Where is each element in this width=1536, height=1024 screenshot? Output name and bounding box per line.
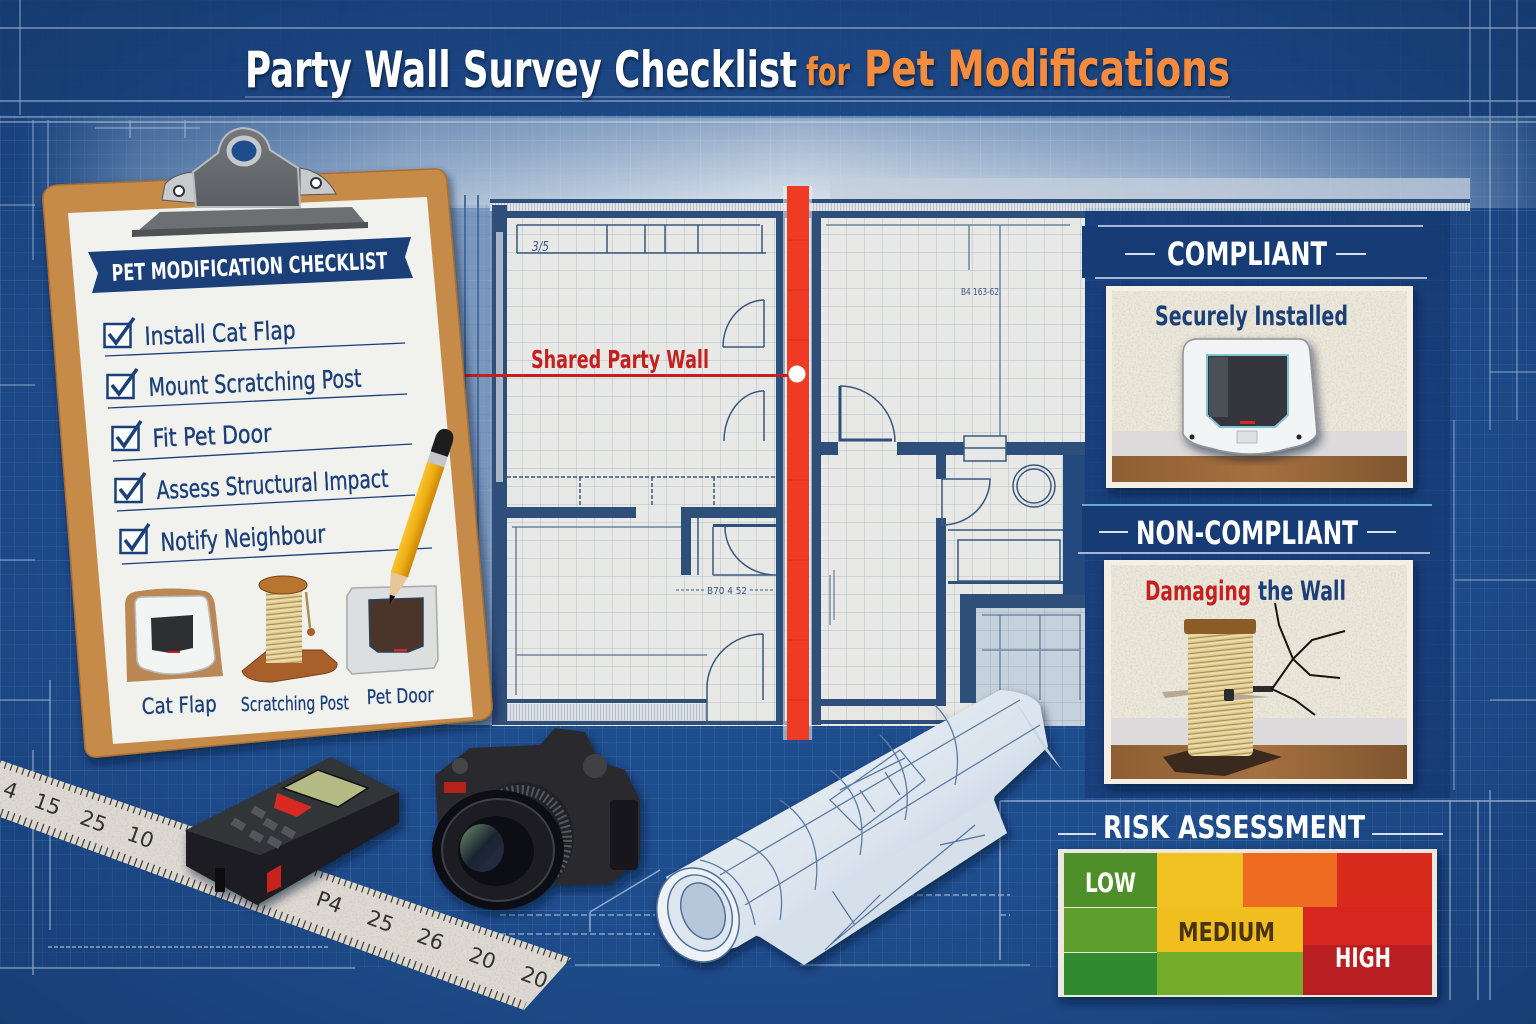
icon: pencil: [380, 427, 456, 609]
steel ruler: 26: [414, 924, 447, 955]
floor plan: B70 4 52: [707, 586, 747, 597]
icon: scratching post: [242, 576, 337, 682]
label: pet door: Pet Door: [366, 683, 435, 709]
second roll: [740, 770, 1007, 965]
party wall red strip: [783, 186, 812, 740]
shared party wall label and leader: [448, 345, 806, 382]
icon: pet door: [347, 586, 438, 674]
steel ruler: 20: [466, 943, 499, 974]
compliant photo: securely installed cat flap: Securely Installed: [1155, 301, 1348, 332]
steel ruler: 15: [31, 789, 64, 820]
main roll: [666, 690, 1048, 957]
title: for: [806, 50, 850, 94]
checklist item: install cat flap: Install Cat Flap: [144, 315, 296, 351]
clipboard board: [43, 169, 492, 757]
steel ruler: [0, 760, 571, 1010]
title: Party Wall Survey Checklist: [245, 41, 797, 99]
checklist item: mount scratching post: Mount Scratching Post: [148, 364, 362, 402]
laser distance meter: [186, 757, 399, 905]
steel ruler: 20: [518, 962, 551, 993]
non-compliant photo: damaging the wall: the Wall: [1258, 576, 1346, 607]
steel ruler: P4: [313, 887, 346, 918]
compliant heading: [1082, 226, 1440, 278]
compliant heading: COMPLIANT: [1167, 235, 1327, 273]
non-compliant photo: damaging the wall: Damaging: [1145, 576, 1251, 607]
high label: HIGH: [1335, 943, 1391, 974]
checklist item: fit pet door: Fit Pet Door: [152, 419, 273, 453]
rolled blueprints: [643, 690, 1062, 974]
label: cat flap: Cat Flap: [141, 692, 217, 720]
steel ruler: 25: [77, 806, 110, 837]
checklist item: assess structural impact: Assess Structural Impact: [156, 464, 389, 505]
checklist item: notify neighbour: Notify Neighbour: [160, 519, 327, 557]
metal clip: [132, 128, 368, 237]
checklist item: mount scratching post: [108, 364, 407, 408]
risk assessment matrix: [1058, 849, 1437, 997]
checklist item: install cat flap: [104, 315, 405, 356]
checklist item: assess structural impact: [116, 464, 415, 511]
steel ruler: 25: [364, 906, 397, 937]
icon: cat flap: [125, 588, 223, 682]
camera: [432, 728, 640, 910]
non-compliant heading: NON-COMPLIANT: [1136, 514, 1358, 552]
medium label: MEDIUM: [1178, 918, 1275, 948]
checklist item: notify neighbour: [120, 519, 432, 564]
paper sheet: [68, 197, 473, 744]
checklist item: fit pet door: [112, 419, 412, 461]
steel ruler: 4: [0, 777, 21, 804]
shared party wall label and leader: Shared Party Wall: [531, 345, 709, 374]
non-compliant photo: damaging the wall: [1104, 560, 1413, 784]
steel ruler: 10: [124, 822, 157, 853]
floor plan: 3/5: [532, 240, 549, 255]
floor plan: [447, 195, 1470, 726]
non-compliant heading: [1078, 505, 1432, 553]
label: scratching post: Scratching Post: [241, 692, 349, 716]
risk assessment heading: RISK ASSESSMENT: [1103, 810, 1365, 846]
compliant photo: securely installed cat flap: [1106, 286, 1413, 488]
clipboard: [43, 128, 492, 757]
banner: pet modification checklist: PET MODIFICATION CHECKLIST: [111, 248, 388, 287]
title: Pet Modifications: [864, 40, 1230, 98]
floor plan: B4 163-62: [961, 287, 999, 298]
banner: pet modification checklist: [88, 237, 413, 293]
low label: LOW: [1085, 868, 1136, 899]
